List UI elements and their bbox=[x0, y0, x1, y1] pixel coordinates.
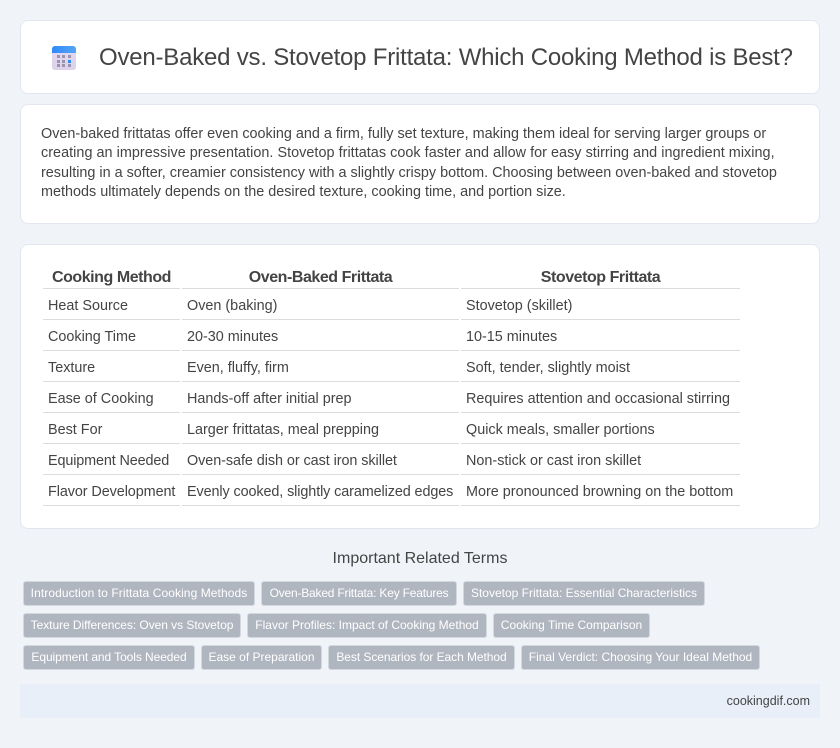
row: cooking time: Cooking Time bbox=[48, 329, 136, 345]
row: ease of cooking: Ease of Cooking bbox=[48, 391, 154, 407]
row: heat source: Oven (baking) bbox=[187, 298, 277, 314]
row: heat source: Heat Source bbox=[48, 298, 128, 314]
tag: Cooking Time Comparison bbox=[501, 618, 642, 632]
header panel bbox=[20, 20, 820, 94]
tag bbox=[521, 645, 760, 670]
tag bbox=[201, 645, 322, 670]
row: cooking time bbox=[48, 329, 557, 345]
table header bbox=[52, 269, 661, 286]
row: heat source: Stovetop (skillet) bbox=[466, 298, 572, 314]
tag: Final Verdict: Choosing Your Ideal Method bbox=[529, 650, 752, 664]
tag: Flavor Profiles: Impact of Cooking Method bbox=[255, 618, 479, 632]
row: ease of cooking bbox=[48, 391, 730, 407]
row: flavor development bbox=[48, 484, 733, 500]
row: texture: Even, fluffy, firm bbox=[187, 360, 289, 376]
row: equipment needed bbox=[48, 453, 642, 469]
tag bbox=[23, 613, 241, 638]
row: ease of cooking: Requires attention and occasional stirring bbox=[466, 391, 730, 407]
row: cooking time: 20-30 minutes bbox=[187, 329, 278, 345]
tag: Introduction to Frittata Cooking Methods bbox=[31, 586, 247, 600]
icon: calendar bbox=[52, 46, 76, 70]
intro text: methods ultimately depends on the desired texture, cooking time, and portion size. bbox=[41, 184, 566, 200]
row: cooking time: 10-15 minutes bbox=[466, 329, 557, 345]
row: equipment needed: Oven-safe dish or cast iron skillet bbox=[187, 453, 397, 469]
tag: Stovetop Frittata: Essential Characteristics bbox=[471, 586, 697, 600]
row: equipment needed: Non-stick or cast iron skillet bbox=[466, 453, 641, 469]
row: flavor development: More pronounced browning on the bottom bbox=[466, 484, 733, 500]
title: Oven-Baked vs. Stovetop Frittata: Which Cooking Method is Best? bbox=[99, 44, 793, 71]
tag bbox=[261, 581, 457, 606]
tag: Best Scenarios for Each Method bbox=[336, 650, 507, 664]
row: texture: Texture bbox=[48, 360, 95, 376]
tag: Texture Differences: Oven vs Stovetop bbox=[31, 618, 233, 632]
row: ease of cooking: Hands-off after initial prep bbox=[187, 391, 352, 407]
footer bar bbox=[20, 684, 820, 718]
tag bbox=[328, 645, 515, 670]
footer source: cookingdif.com bbox=[727, 694, 810, 708]
table header: Oven-Baked Frittata bbox=[249, 269, 392, 286]
tag bbox=[23, 581, 255, 606]
row: equipment needed: Equipment Needed bbox=[48, 453, 169, 469]
tag: Equipment and Tools Needed bbox=[31, 650, 187, 664]
row: best for: Best For bbox=[48, 422, 102, 438]
tag: Ease of Preparation bbox=[208, 650, 315, 664]
intro panel bbox=[20, 104, 820, 224]
row: heat source bbox=[48, 298, 572, 314]
row: flavor development: Evenly cooked, slightly caramelized edges bbox=[187, 484, 453, 500]
row: texture bbox=[48, 360, 630, 376]
tag bbox=[23, 645, 195, 670]
intro text: creating an impressive presentation. Stovetop frittatas cook faster and allow for easy stirring and ingredient mixing, bbox=[41, 145, 775, 161]
related terms heading: Important Related Terms bbox=[333, 550, 507, 567]
table header: Cooking Method bbox=[52, 269, 171, 286]
row: best for: Larger frittatas, meal prepping bbox=[187, 422, 379, 438]
tag: Oven-Baked Frittata: Key Features bbox=[270, 586, 448, 600]
intro text bbox=[41, 126, 777, 200]
intro text: resulting in a softer, creamier consistency with a slightly crispy bottom. Choosing between oven-baked and stovetop bbox=[41, 165, 777, 181]
tag bbox=[463, 581, 705, 606]
row: texture: Soft, tender, slightly moist bbox=[466, 360, 630, 376]
row: best for: Quick meals, smaller portions bbox=[466, 422, 655, 438]
row: best for bbox=[48, 422, 655, 438]
intro text: Oven-baked frittatas offer even cooking and a firm, fully set texture, making them ideal for serving larger groups or bbox=[41, 126, 766, 142]
row: flavor development: Flavor Development bbox=[48, 484, 175, 500]
table header: Stovetop Frittata bbox=[541, 269, 660, 286]
tag bbox=[493, 613, 650, 638]
tag bbox=[247, 613, 487, 638]
comparison table panel bbox=[20, 244, 820, 529]
related terms tags bbox=[23, 581, 760, 670]
